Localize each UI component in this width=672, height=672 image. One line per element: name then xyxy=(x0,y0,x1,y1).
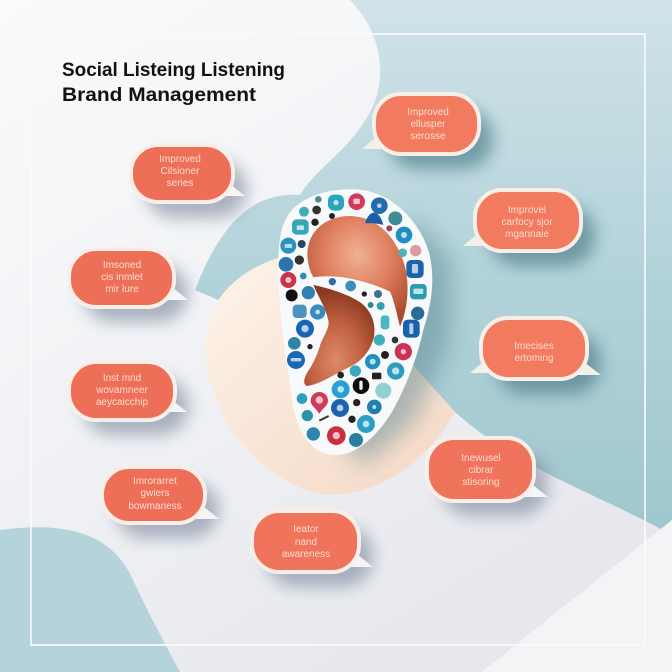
bubble: left 2: cis inmlet xyxy=(101,272,143,283)
bubble: right middle xyxy=(470,318,601,394)
bubble: left 1: series xyxy=(167,178,193,189)
bubble: left 4: gwiers xyxy=(141,488,169,499)
bubble: left 3 xyxy=(69,362,189,435)
bubble: top right: ellusper xyxy=(410,119,446,130)
bubble: left 1: Cilsioner xyxy=(161,166,200,177)
bubble: right lower xyxy=(427,438,548,516)
bubble: top right xyxy=(362,94,493,169)
bubble: left 4: Imrorarret xyxy=(133,476,177,487)
ear upper cavity xyxy=(307,216,408,327)
bubble: bottom xyxy=(252,511,373,587)
bubble: right upper: carfocy sjor xyxy=(501,217,553,228)
background: peach circle xyxy=(206,258,455,495)
bubble: top right: serosse xyxy=(410,131,446,142)
title xyxy=(62,59,285,106)
bubble: right middle: ertoming xyxy=(515,353,553,364)
social media icons xyxy=(279,193,427,447)
bubble: right lower: stisoring xyxy=(462,477,500,488)
bubble: left 2: Imsoned xyxy=(103,260,141,271)
bubble: left 2: mir lure xyxy=(105,284,139,295)
bubble: right upper: Improvel xyxy=(508,205,546,216)
title: Social Listeing Listening xyxy=(62,59,285,81)
title: Brand Management xyxy=(62,84,257,106)
ear shadow xyxy=(345,215,452,465)
bubble: left 3: Inst mnd xyxy=(103,373,141,384)
bubble: left 4 xyxy=(102,467,219,538)
bubble: right upper: mgannaie xyxy=(505,229,549,240)
bubble: right middle: Imecises xyxy=(514,341,554,352)
bubble: bottom: awareness xyxy=(282,549,330,560)
bubble: right lower: cibrar xyxy=(468,465,494,476)
bubble: right lower: Inewusel xyxy=(461,453,501,464)
bubble: bottom: Ieator xyxy=(293,524,319,535)
bubble: left 4: bowmaness xyxy=(128,501,182,512)
bubble: left 3: wovamneer xyxy=(95,385,149,396)
ear lower cavity xyxy=(304,285,374,386)
bubble: left 1: Improved xyxy=(159,154,201,165)
bubble: left 3: aeycaicchip xyxy=(96,397,149,408)
background: bottom-right pale shape xyxy=(482,520,672,672)
bubble: top right: Improved xyxy=(407,107,449,118)
bubble: bottom: nand xyxy=(295,537,317,548)
ear illustration xyxy=(278,189,452,465)
ear body xyxy=(278,189,432,455)
bubble: left 2 xyxy=(69,249,188,322)
background: bottom-left teal shape xyxy=(0,527,180,672)
bubble: right upper xyxy=(463,190,595,266)
bubble: left 1 xyxy=(131,145,247,218)
